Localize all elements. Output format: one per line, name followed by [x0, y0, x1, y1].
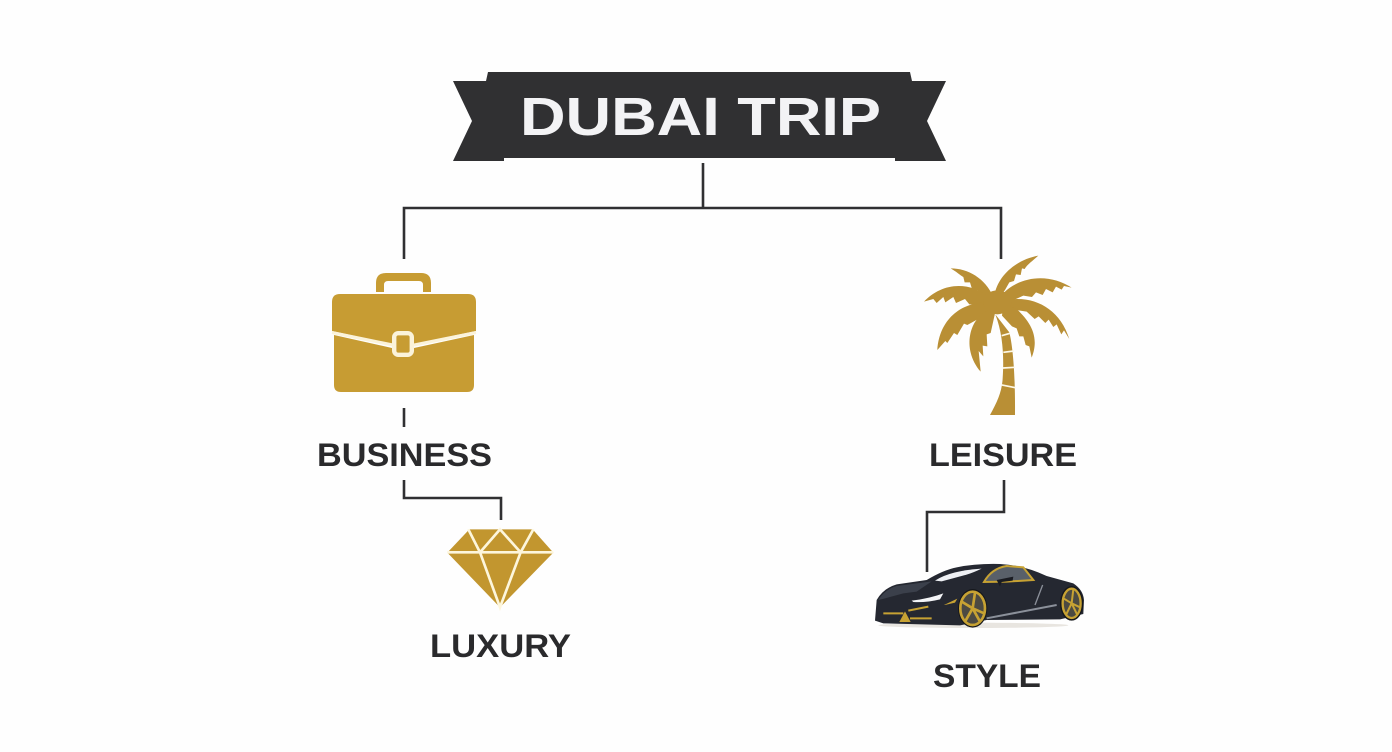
- connector: business to luxury: [404, 480, 501, 520]
- label: luxury: LUXURY: [430, 628, 571, 664]
- icon: sports car: [875, 564, 1084, 628]
- label: business: BUSINESS: [317, 437, 492, 473]
- connector: leisure to style: [927, 480, 1004, 572]
- title banner: [453, 72, 946, 161]
- connector lines: title to branches: [404, 163, 1001, 259]
- icon: palm tree: [924, 256, 1072, 415]
- icon: briefcase: [332, 273, 476, 392]
- label: leisure: LEISURE: [929, 437, 1077, 473]
- label: style: STYLE: [933, 658, 1041, 694]
- connector: briefcase to business label: [403, 408, 405, 427]
- title: DUBAI TRIP: [520, 87, 881, 147]
- icon: diamond: [447, 529, 553, 607]
